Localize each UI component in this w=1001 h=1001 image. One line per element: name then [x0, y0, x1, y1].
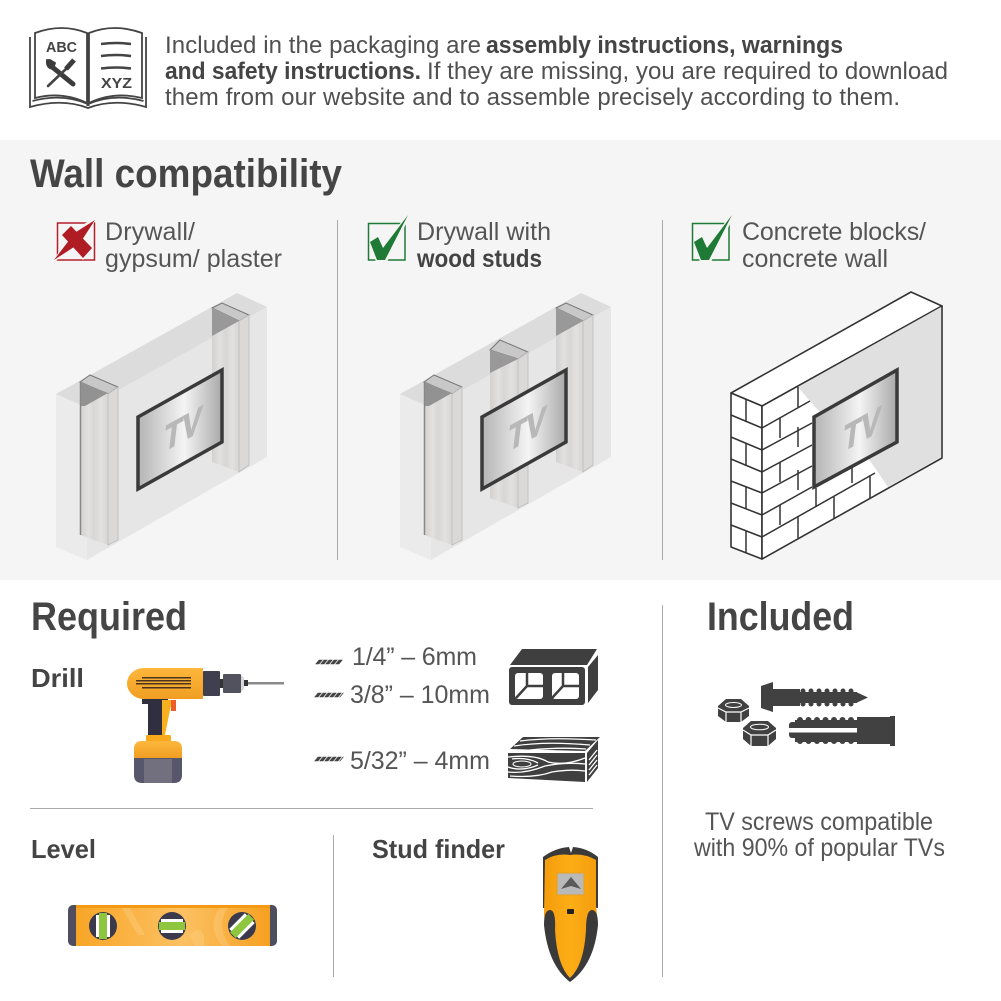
TV screen: TV	[506, 397, 548, 460]
label: drywall: gypsum/ plaster	[105, 245, 282, 273]
TV screen	[482, 370, 566, 489]
icon: instruction book: ABC	[46, 40, 78, 56]
icon: drill bit two	[316, 693, 342, 697]
TV screen: TV	[841, 397, 883, 460]
TV screen	[138, 370, 222, 489]
label: drill: Drill	[31, 663, 84, 693]
label: drywall: Drywall/	[105, 218, 195, 246]
icon: drill bit three	[316, 757, 342, 761]
TV screen	[814, 370, 897, 487]
label: stud finder: Stud finder	[372, 834, 505, 864]
intro text: and safety instructions.	[165, 58, 421, 85]
icon: green check two	[692, 212, 734, 262]
icon: concrete block	[509, 649, 598, 705]
label: drywall	[105, 218, 282, 273]
label: concrete: concrete wall	[742, 245, 888, 273]
text: TV screws: with 90% of popular TVs	[693, 834, 945, 862]
icon: drill	[127, 668, 284, 783]
nut two	[743, 721, 776, 746]
intro text: If they are missing, you are required to download	[427, 58, 948, 85]
illustration: drywall with wood studs and TV	[400, 293, 611, 560]
icon: instruction book	[30, 28, 146, 108]
label: size three: 5/32” – 4mm	[350, 747, 490, 775]
label: drywall with wood studs: wood studs	[416, 245, 542, 273]
wall anchor	[789, 716, 895, 746]
label: size one: 1/4” – 6mm	[352, 643, 477, 671]
intro text: Included in the packaging are	[165, 32, 481, 59]
divider required	[30, 808, 593, 810]
label: drywall with wood studs	[416, 218, 551, 273]
illustration: drywall wall with TV	[56, 293, 267, 560]
heading: included: Included	[707, 595, 854, 639]
label: drywall with wood studs: Drywall with	[417, 218, 551, 246]
icon: drill bit one	[317, 660, 342, 664]
screw	[761, 682, 868, 712]
intro text: them from our website and to assemble precisely according to them.	[165, 84, 900, 111]
panel: wall compatibility	[0, 140, 1001, 580]
label: size two: 3/8” – 10mm	[350, 681, 490, 709]
icon: green check one	[368, 212, 410, 262]
label: concrete: Concrete blocks/	[742, 218, 926, 246]
intro text: assembly instructions, warnings	[486, 32, 843, 59]
text: TV screws: TV screws compatible	[705, 808, 933, 836]
icon: wood	[508, 737, 600, 782]
illustration: concrete wall with TV	[731, 292, 942, 559]
icon: spirit level	[68, 905, 277, 946]
text: TV screws	[693, 808, 945, 862]
icon: stud finder	[543, 847, 598, 982]
heading: wall compatibility: Wall compatibility	[30, 152, 343, 196]
intro text	[165, 32, 948, 111]
nut one	[718, 699, 749, 722]
label: level: Level	[31, 834, 96, 864]
icon: instruction book: XYZ	[101, 76, 132, 92]
icon: screws and nuts	[718, 682, 895, 746]
TV screen: TV	[162, 397, 204, 460]
label: concrete	[742, 218, 926, 273]
heading: required: Required	[31, 595, 187, 639]
icon: red cross	[53, 217, 97, 262]
